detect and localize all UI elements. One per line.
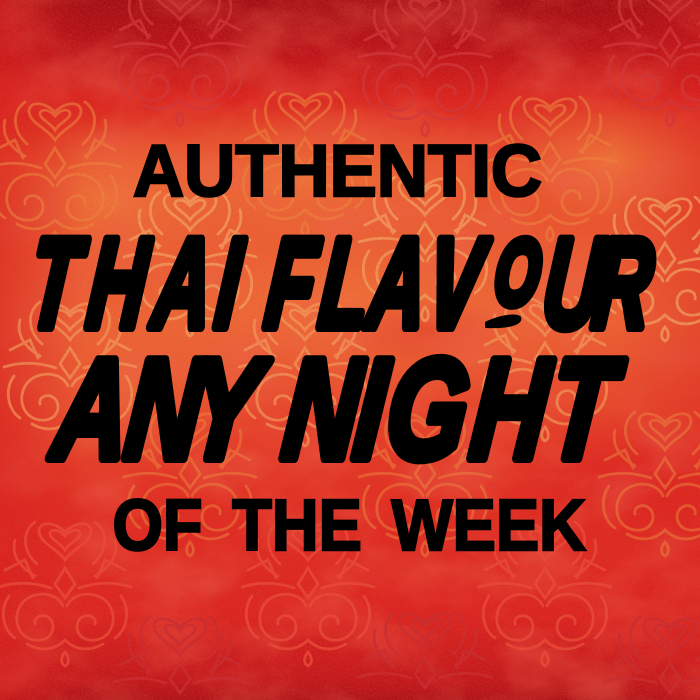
heading: thai flavour: THAI FLAV — [23, 213, 495, 355]
heading: of the week: OF — [113, 485, 220, 566]
underline under the o — [485, 315, 521, 328]
heading: of the week: THE — [232, 485, 380, 566]
heading: authentic: AUTHENTIC — [133, 131, 542, 212]
heading: of the week: WEEK — [392, 485, 586, 566]
heading: thai flavour: UR — [537, 213, 659, 355]
heading: thai flavour: O — [490, 221, 545, 324]
heading: of the week — [113, 485, 586, 566]
heading: any night: ANY NIGHT — [45, 331, 629, 489]
